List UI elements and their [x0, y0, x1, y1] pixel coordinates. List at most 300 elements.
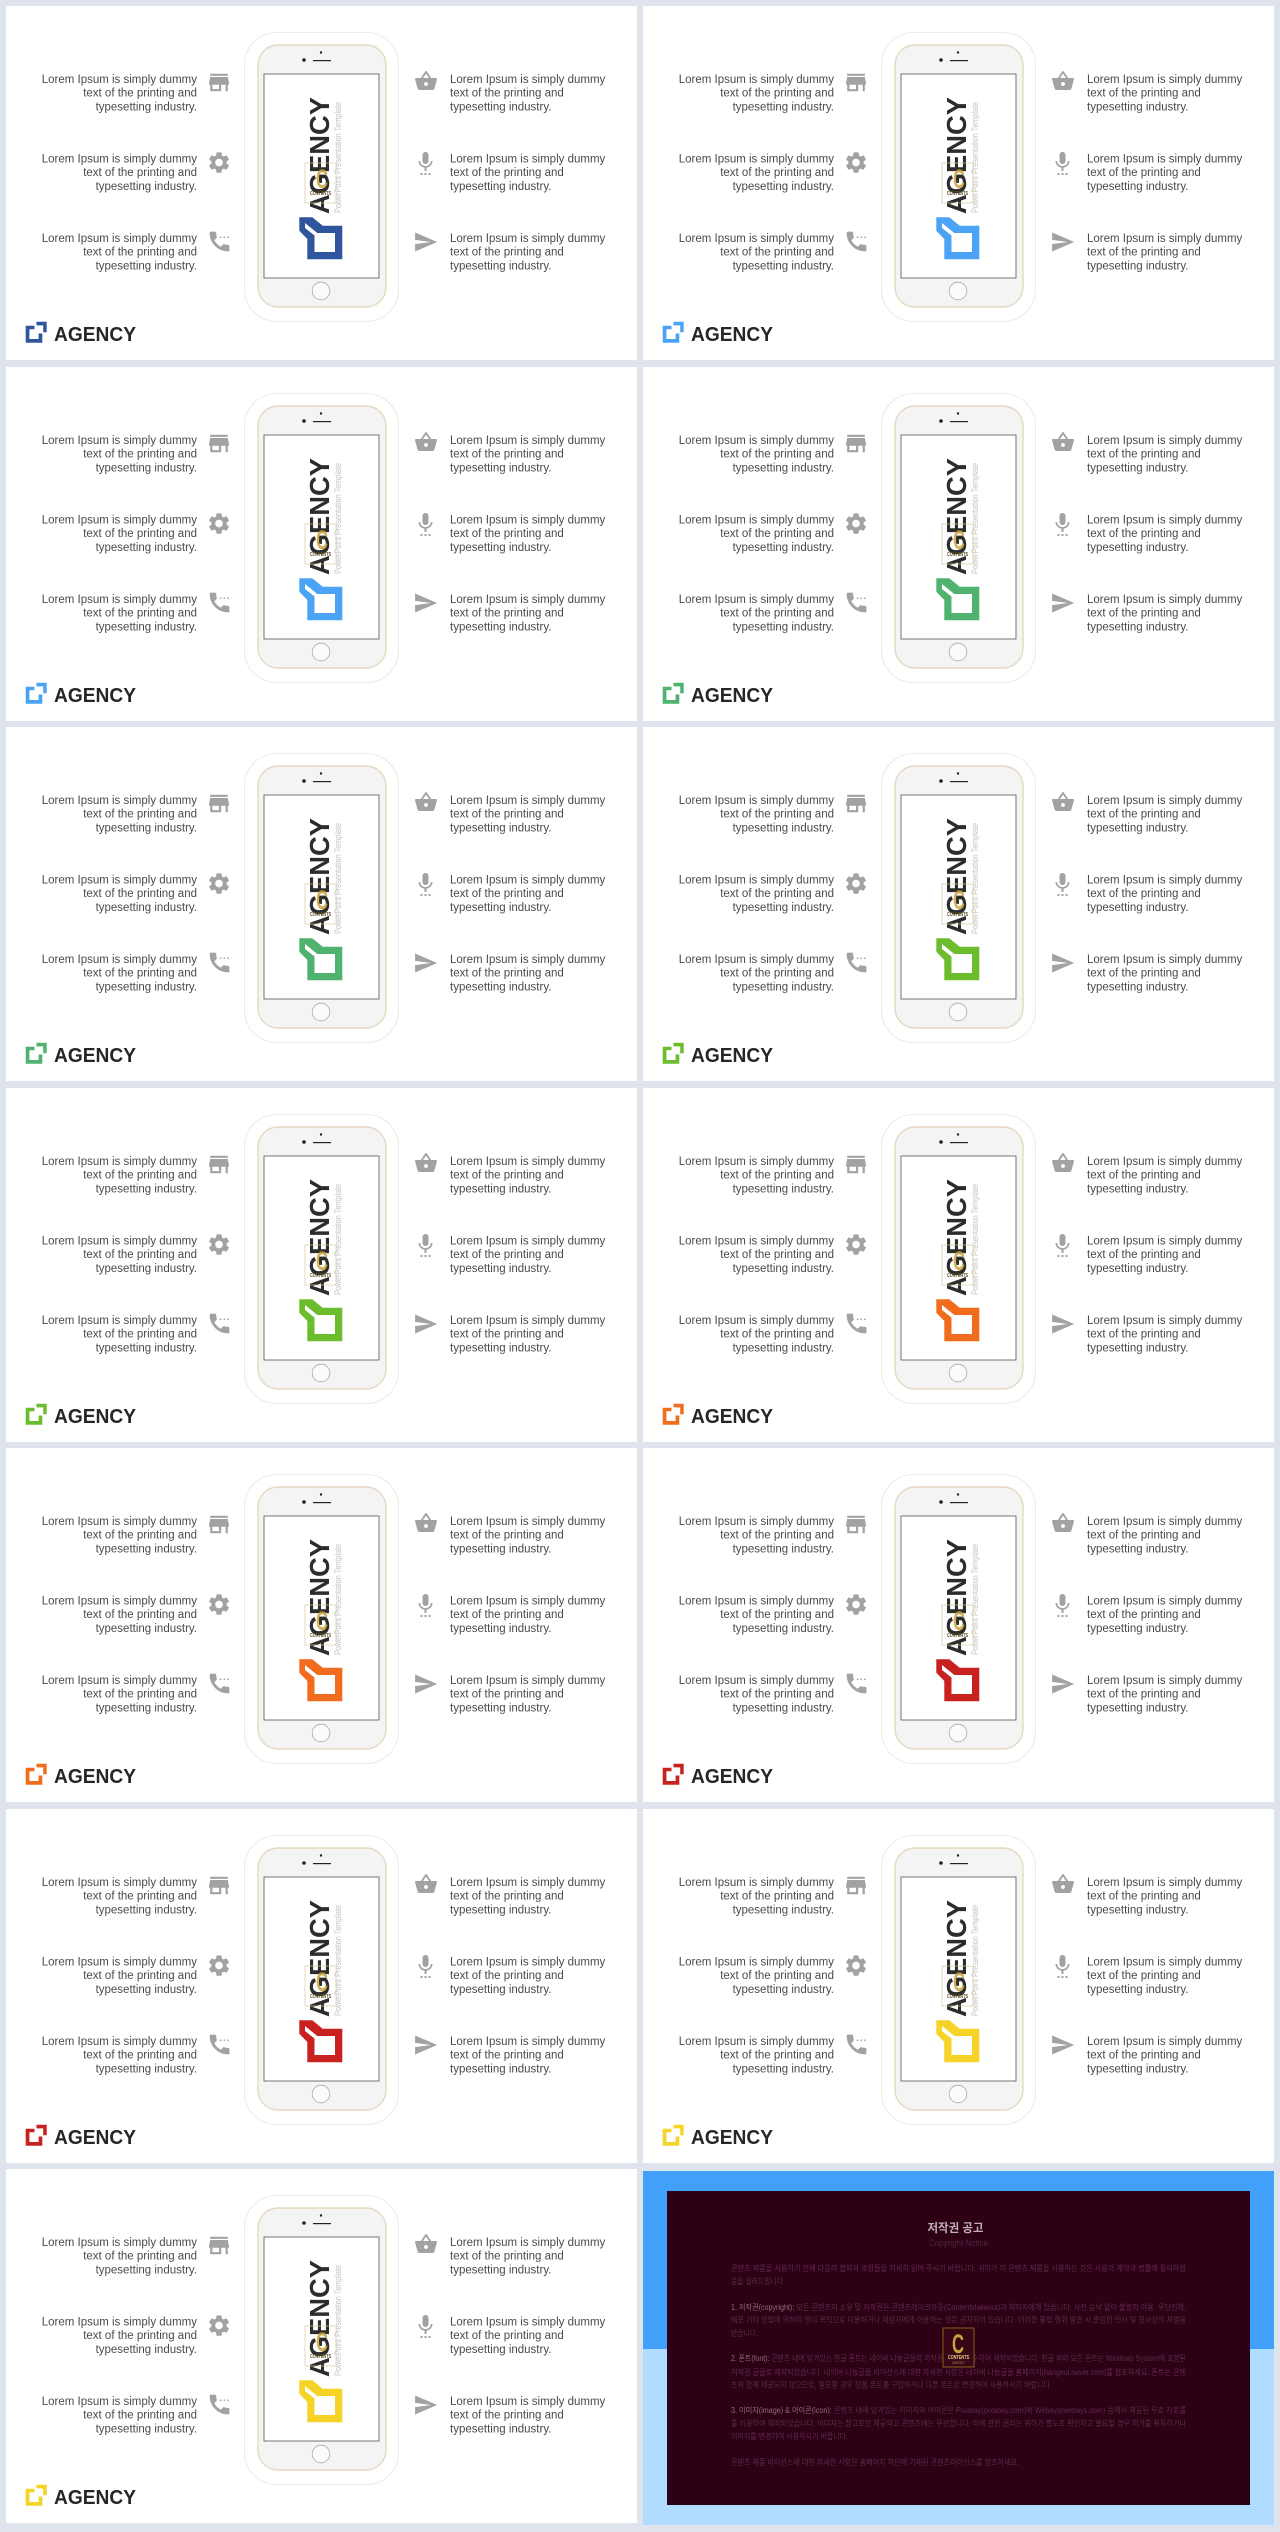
text block left 3: typesetting industry.: [96, 1702, 197, 1714]
text block left 3: text of the printing and: [83, 2050, 197, 2062]
text block right 1: typesetting industry.: [450, 1904, 551, 1916]
icon: store: [846, 435, 866, 452]
phone mockup: [244, 1114, 398, 1404]
icon: basket: [1052, 1153, 1074, 1172]
screen subtitle: PowerPoint Presentation Template: [970, 823, 980, 934]
text block right 1: Lorem Ipsum is simply dummy: [1087, 795, 1243, 807]
screen subtitle: PowerPoint Presentation Template: [970, 1184, 980, 1295]
text block left 2: text of the printing and: [720, 528, 834, 540]
text block: section 3 image and icon: 를 이용하여 제작되었습니다. 이미지는 참고로만 제공되고 콘텐츠에는 무관합니다. 이에 관한 권리는 귀하가 별도로 확인하고 필요할 경우 허가를 취득하거나: [731, 2418, 1187, 2428]
text block right 3: typesetting industry.: [1087, 2063, 1188, 2075]
text block right 3: typesetting industry.: [1087, 981, 1188, 993]
text block right 3: text of the printing and: [450, 2410, 564, 2422]
text block left 3: Lorem Ipsum is simply dummy: [679, 1315, 834, 1327]
text block right 3: Lorem Ipsum is simply dummy: [1087, 594, 1243, 606]
icon: basket: [415, 1513, 437, 1532]
icon: phone call: [847, 232, 866, 251]
icon: phone call: [847, 953, 866, 972]
panel: slide 5 green: [6, 727, 637, 1081]
text block right 1: text of the printing and: [450, 1530, 564, 1542]
icon: phone call: [847, 2035, 866, 2054]
text block right 2: typesetting industry.: [1087, 542, 1188, 554]
footer logo: AGENCY: [691, 324, 774, 346]
text block right 2: typesetting industry.: [450, 2344, 551, 2356]
footer logo: AGENCY: [54, 2127, 137, 2149]
watermark badge: C: [316, 2327, 328, 2357]
icon: gear: [209, 513, 229, 534]
text block left 3: typesetting industry.: [96, 981, 197, 993]
icon: phone call: [210, 593, 229, 612]
text block left 1: text of the printing and: [83, 1530, 197, 1542]
screen wordmark: AGENCY: [304, 1179, 335, 1296]
screen wordmark: AGENCY: [304, 97, 335, 214]
text block right 1: text of the printing and: [450, 449, 564, 461]
watermark badge: C: [316, 885, 328, 915]
text block left 2: Lorem Ipsum is simply dummy: [42, 1956, 197, 1968]
text block right 2: Lorem Ipsum is simply dummy: [450, 1596, 606, 1608]
text block left 3: typesetting industry.: [733, 1342, 834, 1354]
panel: slide 11 red: [6, 1809, 637, 2163]
watermark badge: CONTENTS: [947, 912, 969, 918]
text block right 1: Lorem Ipsum is simply dummy: [1087, 1156, 1243, 1168]
text block left 3: typesetting industry.: [733, 1702, 834, 1714]
text block right 1: typesetting industry.: [1087, 1543, 1188, 1555]
text block right 3: Lorem Ipsum is simply dummy: [450, 2036, 606, 2048]
panel: slide 2 blue: [643, 6, 1274, 360]
watermark badge: CONTENTS: [310, 1633, 332, 1639]
watermark badge: C: [316, 1606, 328, 1636]
icon: basket: [415, 71, 437, 90]
text block right 2: text of the printing and: [450, 1609, 564, 1621]
icon: basket: [415, 1153, 437, 1172]
icon: send: [1052, 1675, 1074, 1693]
text block right 3: typesetting industry.: [450, 1702, 551, 1714]
text block left 2: text of the printing and: [83, 888, 197, 900]
phone mockup: [882, 1474, 1036, 1764]
text block left 2: Lorem Ipsum is simply dummy: [679, 1236, 834, 1248]
text block right 2: Lorem Ipsum is simply dummy: [450, 874, 606, 886]
text block left 2: typesetting industry.: [733, 542, 834, 554]
text block: intro: 음을 일러드립니다.: [731, 2276, 785, 2286]
footer logo: [26, 2485, 137, 2509]
text block left 3: typesetting industry.: [96, 1342, 197, 1354]
panel: slide 6 lime: [643, 727, 1274, 1081]
text block right 2: text of the printing and: [450, 888, 564, 900]
icon: gear: [846, 1955, 866, 1976]
text block right 2: typesetting industry.: [1087, 1623, 1188, 1635]
text block: closing note: 콘텐츠 제품 라이선스에 대한 자세한 사항은 홈페이지 하단에 기재된 콘텐츠라이선스를 참조하세요.: [731, 2457, 1019, 2467]
text block left 1: typesetting industry.: [96, 2264, 197, 2276]
text block right 1: text of the printing and: [1087, 809, 1201, 821]
text block right 1: Lorem Ipsum is simply dummy: [1087, 1516, 1243, 1528]
screen wordmark: AGENCY: [941, 818, 972, 935]
icon: store: [846, 74, 866, 91]
screen subtitle: PowerPoint Presentation Template: [333, 823, 343, 934]
panel: slide 10 red: [643, 1448, 1274, 1802]
text block left 2: typesetting industry.: [733, 181, 834, 193]
text block left 1: Lorem Ipsum is simply dummy: [679, 74, 834, 86]
icon: gear: [209, 2315, 229, 2336]
icon: microphone: [418, 1594, 432, 1617]
text block left 2: Lorem Ipsum is simply dummy: [679, 1956, 834, 1968]
watermark badge: C: [316, 525, 328, 555]
screen subtitle: PowerPoint Presentation Template: [333, 463, 343, 574]
text block right 1: Lorem Ipsum is simply dummy: [450, 435, 606, 447]
footer logo: [663, 683, 774, 707]
watermark badge: CONTENTS: [310, 552, 332, 558]
text block: section 2 font: 츠와 함께 제공되지 않으므로, 필요할 경우 정품 폰트를 구입하거나 다른 폰트로 변경하여 사용하시기 바랍니다.: [731, 2380, 1052, 2390]
text block right 1: typesetting industry.: [1087, 1904, 1188, 1916]
screen subtitle: PowerPoint Presentation Template: [333, 2265, 343, 2376]
icon: send: [1052, 1315, 1074, 1333]
watermark badge: CONTENTS: [947, 552, 969, 558]
text block left 2: Lorem Ipsum is simply dummy: [679, 874, 834, 886]
text block left 3: Lorem Ipsum is simply dummy: [42, 233, 197, 245]
text block left 3: text of the printing and: [720, 2050, 834, 2062]
text block left 2: text of the printing and: [83, 1249, 197, 1261]
text block right 3: text of the printing and: [450, 1689, 564, 1701]
text block left 3: Lorem Ipsum is simply dummy: [42, 1315, 197, 1327]
text block right 1: text of the printing and: [1087, 449, 1201, 461]
text block left 1: Lorem Ipsum is simply dummy: [42, 74, 197, 86]
icon: phone call: [210, 2395, 229, 2414]
text block right 2: Lorem Ipsum is simply dummy: [450, 154, 606, 166]
phone mockup: [244, 394, 398, 682]
screen logo mark: [936, 1659, 979, 1701]
icon: gear: [209, 152, 229, 173]
text block left 1: typesetting industry.: [96, 1904, 197, 1916]
text block left 3: Lorem Ipsum is simply dummy: [42, 594, 197, 606]
text block: section 1 copyright: 1. 저작권(copyright): 모든 콘텐츠의 소유 및 저작권은 콘텐츠레이크아웃(Contentslakeout)과 제작자에게 있습니다. 사전 승낙 없이 불법적 이용, 무단전재,: [731, 2302, 1186, 2312]
icon: send: [415, 1315, 437, 1333]
text block right 3: Lorem Ipsum is simply dummy: [450, 594, 606, 606]
text block right 1: typesetting industry.: [450, 822, 551, 834]
icon: send: [415, 2036, 437, 2054]
phone mockup: [882, 1836, 1036, 2124]
screen logo mark: [936, 938, 979, 980]
text block: intro: [731, 2263, 1187, 2286]
footer logo: [26, 1404, 137, 1428]
icon: send: [1052, 2036, 1074, 2054]
watermark badge: [305, 163, 336, 203]
phone mockup: [882, 754, 1036, 1042]
text block right 3: text of the printing and: [450, 968, 564, 980]
icon: store: [209, 2237, 229, 2254]
text block left 2: text of the printing and: [83, 1970, 197, 1982]
icon: basket: [1052, 1874, 1074, 1893]
text block: section 2 font: 2. 폰트(font): 콘텐츠 내에 담겨있는 한글 폰트는 네이버 나눔글꼴의 저작권 규정을 준수하여 제작되었습니다. 한글 외의 모든 폰트는 Windows System에 포함된: [731, 2353, 1186, 2363]
text block right 1: text of the printing and: [450, 2251, 564, 2263]
text block right 3: Lorem Ipsum is simply dummy: [1087, 954, 1243, 966]
screen logo mark: [936, 2020, 979, 2062]
text block left 2: text of the printing and: [83, 1609, 197, 1621]
text block: intro: 콘텐츠 제품을 사용하기 전에 다음의 협약과 조항들을 자세히 읽어 주시기 바랍니다. 귀하가 이 콘텐츠 제품을 사용하는 것은 사용자 계약과 법률에 동의하였: [731, 2263, 1187, 2273]
text block left 2: typesetting industry.: [733, 1984, 834, 1996]
footer logo: AGENCY: [54, 1406, 137, 1428]
screen logo mark: [299, 1659, 342, 1701]
text block left 1: text of the printing and: [83, 88, 197, 100]
text block right 2: Lorem Ipsum is simply dummy: [1087, 154, 1243, 166]
footer logo: AGENCY: [54, 2487, 137, 2509]
footer logo: [663, 2125, 774, 2149]
text block right 1: text of the printing and: [450, 1891, 564, 1903]
icon: microphone: [1056, 152, 1070, 175]
text block right 1: text of the printing and: [1087, 1891, 1201, 1903]
panel: slide 1 navy: [6, 6, 637, 360]
text block right 2: Lorem Ipsum is simply dummy: [450, 2316, 606, 2328]
icon: phone call: [210, 2035, 229, 2054]
text block right 2: typesetting industry.: [450, 1623, 551, 1635]
text block right 1: Lorem Ipsum is simply dummy: [450, 1877, 606, 1889]
text block left 3: typesetting industry.: [96, 621, 197, 633]
text block left 3: text of the printing and: [83, 968, 197, 980]
panel: slide 12 yellow: [643, 1809, 1274, 2163]
text block left 2: typesetting industry.: [733, 902, 834, 914]
text block left 2: Lorem Ipsum is simply dummy: [42, 1596, 197, 1608]
screen logo mark: [299, 578, 342, 620]
text block left 3: Lorem Ipsum is simply dummy: [679, 1675, 834, 1687]
text block right 2: typesetting industry.: [1087, 181, 1188, 193]
icon: microphone: [1056, 1955, 1070, 1978]
watermark badge: CONTENTS: [310, 191, 332, 197]
text block right 2: text of the printing and: [450, 167, 564, 179]
footer logo: AGENCY: [54, 685, 137, 707]
text block: section 3 image and icon: [731, 2405, 1187, 2441]
screen logo mark: [299, 2020, 342, 2062]
screen wordmark: AGENCY: [304, 2260, 335, 2377]
icon: gear: [209, 1594, 229, 1615]
footer logo: AGENCY: [691, 1045, 774, 1067]
text block: section 1 copyright: 배포 기타 방법에 의하여 영리 목적으로 이용하거나 제삼자에게 이용하는 것은 금지되어 있습니다. 이러한 불법 행위 발견 시 준엄한 민사 및 형사상의 처벌을: [731, 2314, 1186, 2324]
watermark badge: [942, 1605, 973, 1645]
icon: microphone: [418, 1234, 432, 1257]
text block right 2: typesetting industry.: [450, 1984, 551, 1996]
icon: basket: [1052, 71, 1074, 90]
footer logo: [26, 1764, 137, 1788]
icon: send: [1052, 233, 1074, 251]
text block right 3: text of the printing and: [450, 2050, 564, 2062]
text block right 3: typesetting industry.: [450, 260, 551, 272]
icon: basket: [415, 792, 437, 811]
screen subtitle: PowerPoint Presentation Template: [333, 1184, 343, 1295]
text block left 1: typesetting industry.: [733, 101, 834, 113]
icon: gear: [846, 513, 866, 534]
watermark badge: CONTENTS: [310, 1994, 332, 2000]
text block left 1: text of the printing and: [720, 1891, 834, 1903]
text block left 1: text of the printing and: [720, 1170, 834, 1182]
text block right 3: Lorem Ipsum is simply dummy: [1087, 233, 1243, 245]
text block right 2: text of the printing and: [1087, 528, 1201, 540]
icon: microphone: [418, 513, 432, 536]
subheading: copyright notice English: Copyright Notice: [929, 2238, 988, 2248]
icon: gear: [846, 1594, 866, 1615]
icon: phone call: [847, 593, 866, 612]
icon: store: [209, 1877, 229, 1894]
text block right 1: text of the printing and: [450, 1170, 564, 1182]
text block right 2: typesetting industry.: [1087, 1263, 1188, 1275]
text block left 2: Lorem Ipsum is simply dummy: [679, 514, 834, 526]
footer logo: AGENCY: [54, 324, 137, 346]
text block left 1: Lorem Ipsum is simply dummy: [42, 435, 197, 447]
text block right 1: typesetting industry.: [450, 2264, 551, 2276]
footer logo: [663, 1404, 774, 1428]
text block right 3: typesetting industry.: [450, 621, 551, 633]
text block right 3: Lorem Ipsum is simply dummy: [450, 2396, 606, 2408]
panel: slide 8 orange: [643, 1088, 1274, 1442]
text block left 1: typesetting industry.: [96, 101, 197, 113]
icon: store: [846, 1516, 866, 1533]
text block left 3: text of the printing and: [720, 1329, 834, 1341]
text block left 3: Lorem Ipsum is simply dummy: [42, 2396, 197, 2408]
text block left 1: typesetting industry.: [733, 462, 834, 474]
watermark badge: [942, 884, 973, 924]
text block left 1: text of the printing and: [720, 88, 834, 100]
panel: slide 9 orange: [6, 1448, 637, 1802]
watermark badge: gold C: [943, 2328, 974, 2367]
text block right 2: Lorem Ipsum is simply dummy: [1087, 1596, 1243, 1608]
watermark badge: CONTENTS: [947, 1633, 969, 1639]
icon: store: [209, 795, 229, 812]
footer logo: AGENCY: [691, 685, 774, 707]
text block left 2: Lorem Ipsum is simply dummy: [42, 514, 197, 526]
icon: basket: [415, 1874, 437, 1893]
screen subtitle: PowerPoint Presentation Template: [333, 102, 343, 213]
text block left 1: typesetting industry.: [96, 1183, 197, 1195]
text block left 1: Lorem Ipsum is simply dummy: [679, 1156, 834, 1168]
text block: section 3 image and icon: 이미지를 변경하여 사용하시기 바랍니다.: [731, 2431, 848, 2441]
text block right 1: Lorem Ipsum is simply dummy: [450, 74, 606, 86]
text block left 3: typesetting industry.: [96, 260, 197, 272]
text block right 3: text of the printing and: [450, 247, 564, 259]
icon: basket: [415, 2234, 437, 2253]
icon: basket: [1052, 792, 1074, 811]
footer logo: AGENCY: [691, 1766, 774, 1788]
text block right 1: text of the printing and: [450, 88, 564, 100]
text block right 1: typesetting industry.: [450, 1543, 551, 1555]
footer logo: [26, 2125, 137, 2149]
icon: phone call: [210, 953, 229, 972]
icon: basket: [415, 432, 437, 451]
icon: microphone: [1056, 1234, 1070, 1257]
text block right 2: typesetting industry.: [1087, 1984, 1188, 1996]
watermark badge: C: [316, 1246, 328, 1276]
text block right 2: text of the printing and: [1087, 888, 1201, 900]
watermark badge: [942, 1245, 973, 1285]
text block right 3: typesetting industry.: [450, 2063, 551, 2075]
text block right 3: Lorem Ipsum is simply dummy: [450, 954, 606, 966]
text block right 1: Lorem Ipsum is simply dummy: [450, 1516, 606, 1528]
text block right 2: Lorem Ipsum is simply dummy: [1087, 1236, 1243, 1248]
text block right 3: Lorem Ipsum is simply dummy: [450, 233, 606, 245]
text block left 3: text of the printing and: [83, 608, 197, 620]
watermark badge: C: [953, 1606, 965, 1636]
heading: copyright notice Korean: 저작권 공고: [928, 2220, 984, 2235]
phone mockup: [244, 754, 398, 1042]
text block left 2: Lorem Ipsum is simply dummy: [42, 154, 197, 166]
text block left 1: text of the printing and: [83, 809, 197, 821]
panel: copyright notice: [643, 2171, 1274, 2525]
text block left 2: text of the printing and: [720, 1609, 834, 1621]
screen wordmark: AGENCY: [941, 1179, 972, 1296]
text block right 3: Lorem Ipsum is simply dummy: [1087, 1315, 1243, 1327]
text block right 3: typesetting industry.: [1087, 260, 1188, 272]
text block right 3: text of the printing and: [1087, 1689, 1201, 1701]
screen logo mark: [936, 578, 979, 620]
text block left 2: text of the printing and: [83, 2330, 197, 2342]
text block left 3: Lorem Ipsum is simply dummy: [42, 1675, 197, 1687]
footer logo: [663, 1043, 774, 1067]
text block right 2: text of the printing and: [1087, 1249, 1201, 1261]
watermark badge: gold C: CONTENTS: [948, 2355, 969, 2361]
text block right 1: typesetting industry.: [1087, 101, 1188, 113]
screen subtitle: PowerPoint Presentation Template: [333, 1544, 343, 1655]
text block left 2: typesetting industry.: [96, 1263, 197, 1275]
text block right 2: typesetting industry.: [450, 542, 551, 554]
watermark badge: [305, 524, 336, 564]
icon: phone call: [210, 1674, 229, 1693]
text block right 3: Lorem Ipsum is simply dummy: [1087, 1675, 1243, 1687]
text block right 2: typesetting industry.: [450, 902, 551, 914]
watermark badge: CONTENTS: [947, 1994, 969, 2000]
watermark badge: gold C: LAKEOUT: [952, 2361, 966, 2365]
phone mockup: [244, 1474, 398, 1764]
text block left 1: Lorem Ipsum is simply dummy: [42, 1156, 197, 1168]
text block left 1: typesetting industry.: [733, 822, 834, 834]
text block left 3: text of the printing and: [83, 2410, 197, 2422]
text block left 1: typesetting industry.: [96, 1543, 197, 1555]
icon: store: [209, 435, 229, 452]
panel: slide 4 green: [643, 367, 1274, 721]
text block right 2: typesetting industry.: [1087, 902, 1188, 914]
text block left 3: typesetting industry.: [96, 2063, 197, 2075]
icon: phone call: [847, 1314, 866, 1333]
text block left 3: Lorem Ipsum is simply dummy: [679, 233, 834, 245]
screen wordmark: AGENCY: [304, 818, 335, 935]
text block right 3: text of the printing and: [1087, 968, 1201, 980]
text block right 1: Lorem Ipsum is simply dummy: [1087, 1877, 1243, 1889]
text block right 2: typesetting industry.: [450, 181, 551, 193]
text block right 3: Lorem Ipsum is simply dummy: [450, 1315, 606, 1327]
screen logo mark: [299, 217, 342, 259]
text block left 3: text of the printing and: [720, 608, 834, 620]
text block left 3: Lorem Ipsum is simply dummy: [679, 954, 834, 966]
icon: phone call: [210, 1314, 229, 1333]
watermark badge: C: [316, 1967, 328, 1997]
text block right 1: text of the printing and: [1087, 1530, 1201, 1542]
text block right 1: typesetting industry.: [450, 1183, 551, 1195]
text block right 2: text of the printing and: [450, 1249, 564, 1261]
watermark badge: [305, 1605, 336, 1645]
text block right 3: text of the printing and: [1087, 2050, 1201, 2062]
text block right 3: text of the printing and: [1087, 608, 1201, 620]
text block: section 1 copyright: 받습니다.: [731, 2328, 758, 2338]
text block left 3: text of the printing and: [720, 1689, 834, 1701]
text block left 1: text of the printing and: [83, 449, 197, 461]
text block left 3: text of the printing and: [83, 1689, 197, 1701]
footer logo: AGENCY: [691, 1406, 774, 1428]
icon: send: [415, 1675, 437, 1693]
watermark badge: [942, 524, 973, 564]
text block right 3: typesetting industry.: [450, 1342, 551, 1354]
text block left 1: typesetting industry.: [733, 1543, 834, 1555]
text block left 1: text of the printing and: [720, 1530, 834, 1542]
text block right 2: Lorem Ipsum is simply dummy: [1087, 874, 1243, 886]
text block right 3: typesetting industry.: [1087, 621, 1188, 633]
text block left 2: typesetting industry.: [96, 181, 197, 193]
text block right 1: typesetting industry.: [1087, 822, 1188, 834]
text block left 3: text of the printing and: [720, 968, 834, 980]
text block right 1: text of the printing and: [1087, 88, 1201, 100]
